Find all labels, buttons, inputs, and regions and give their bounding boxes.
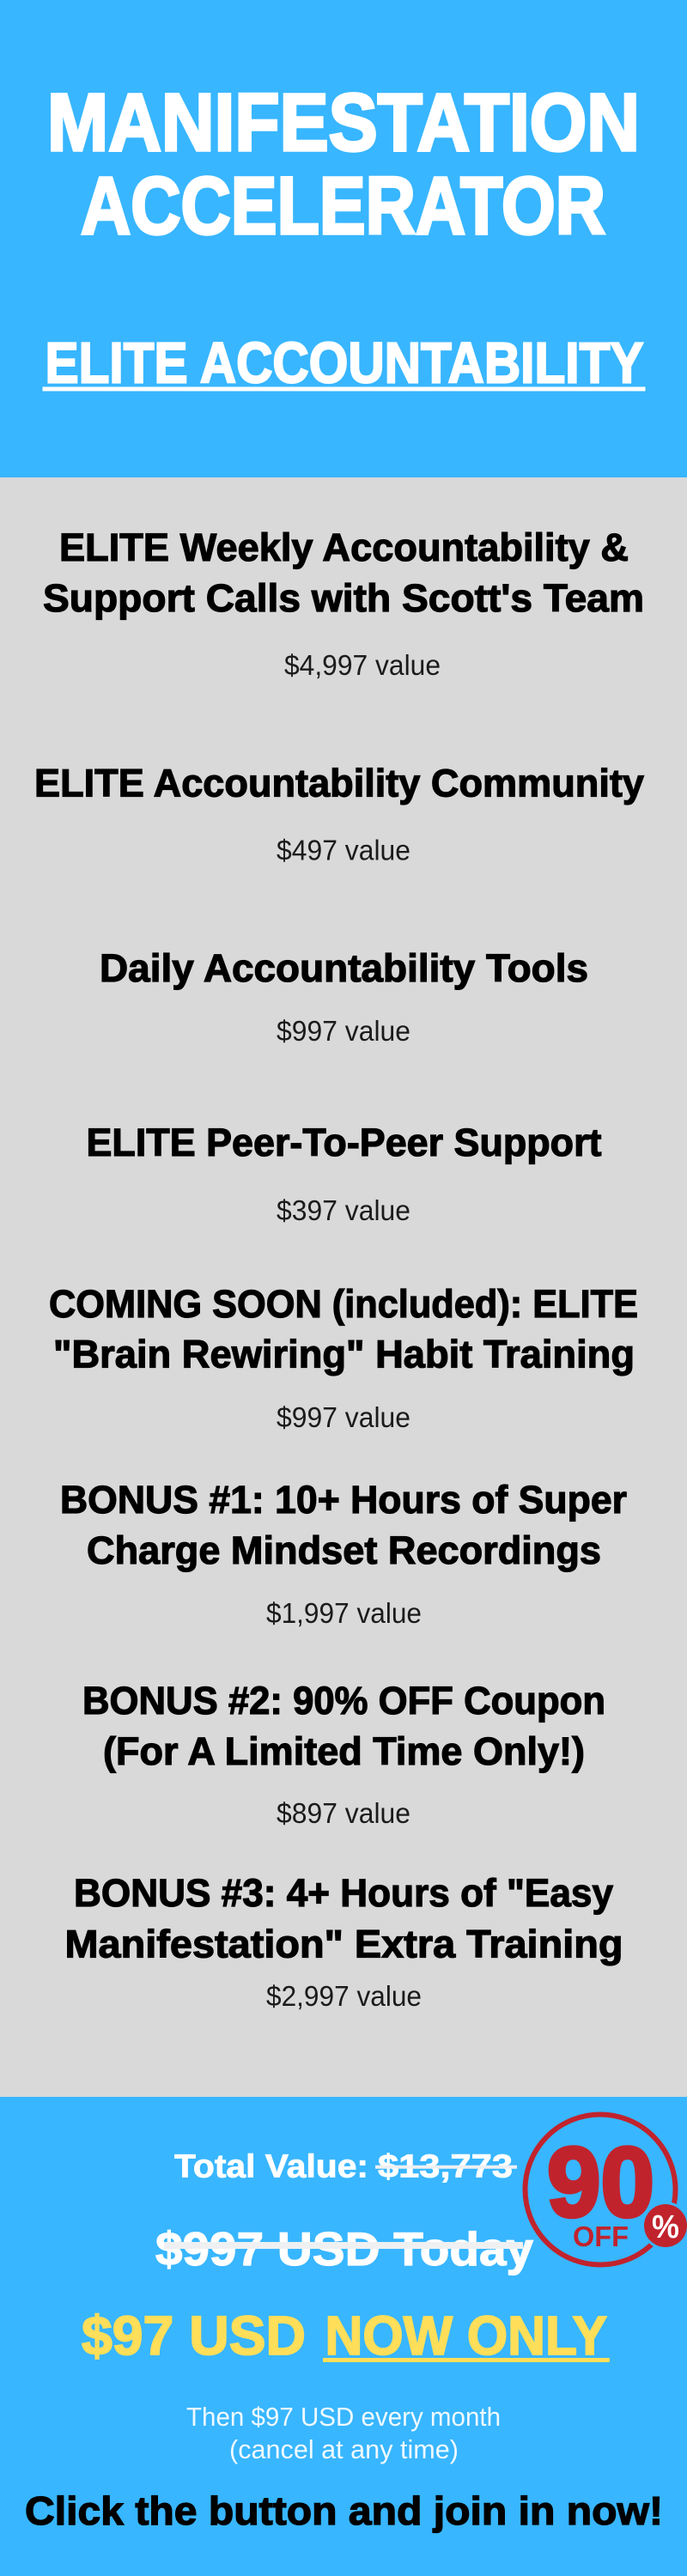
badge: 90% off (526, 2114, 687, 2265)
item: daily tools (100, 946, 588, 1047)
item: community: ELITE Accountability Community (34, 761, 644, 805)
item: bonus 1 (60, 1478, 627, 1629)
item: coming soon (49, 1282, 638, 1433)
item: peer support (86, 1121, 602, 1226)
item: coming soon: COMING SOON (included): ELITE (49, 1282, 638, 1326)
call to action: Click the button and join in now! (25, 2488, 663, 2533)
item: daily tools: $997 value (277, 1015, 410, 1047)
item: bonus 3: $2,997 value (266, 1980, 422, 2012)
item: peer support: $397 value (277, 1194, 410, 1226)
subscription note: (cancel at any time) (229, 2434, 459, 2464)
item: bonus 1: BONUS #1: 10+ Hours of Super (60, 1478, 627, 1522)
item: bonus 3: BONUS #3: 4+ Hours of "Easy (74, 1871, 613, 1915)
total value (174, 2148, 517, 2184)
badge: 90% off: % (652, 2209, 679, 2245)
item: bonus 2: BONUS #2: 90% OFF Coupon (82, 1679, 605, 1722)
item: bonus 2: $897 value (277, 1797, 410, 1829)
item: weekly calls (43, 526, 644, 681)
subscription note: Then $97 USD every month (186, 2402, 501, 2432)
item: community (34, 761, 644, 866)
item: coming soon: "Brain Rewiring" Habit Training (53, 1333, 635, 1376)
item: bonus 2 (82, 1679, 605, 1829)
item: bonus 1: $1,997 value (266, 1597, 422, 1629)
item: weekly calls: Support Calls with Scott's Team (43, 576, 644, 620)
current price: $97 USD (82, 2305, 306, 2366)
total value: $13,773 (378, 2148, 513, 2184)
item: coming soon: $997 value (277, 1401, 410, 1433)
item: weekly calls: $4,997 value (284, 649, 441, 681)
item: bonus 3 (65, 1871, 623, 2012)
title: MANIFESTATION (47, 77, 640, 168)
item: bonus 3: Manifestation" Extra Training (65, 1922, 623, 1966)
item: weekly calls: ELITE Weekly Accountability & (59, 526, 629, 569)
item: peer support: ELITE Peer-To-Peer Support (86, 1121, 602, 1164)
total value: Total Value: (174, 2148, 368, 2184)
panel: header (0, 0, 687, 477)
badge: 90% off: 90 (547, 2128, 654, 2238)
panel: offer items (0, 477, 687, 2097)
title: ACCELERATOR (81, 161, 605, 252)
item: daily tools: Daily Accountability Tools (100, 946, 588, 990)
badge: 90% off: OFF (573, 2221, 629, 2252)
subscription note (186, 2402, 501, 2464)
title (47, 77, 640, 252)
current price (82, 2305, 610, 2366)
item: bonus 1: Charge Mindset Recordings (87, 1528, 601, 1572)
item: community: $497 value (277, 835, 410, 866)
current price: NOW ONLY (325, 2305, 607, 2366)
panel: pricing (0, 2097, 687, 2576)
item: bonus 2: (For A Limited Time Only!) (103, 1729, 585, 1773)
old price: $997 USD Today (155, 2222, 533, 2275)
